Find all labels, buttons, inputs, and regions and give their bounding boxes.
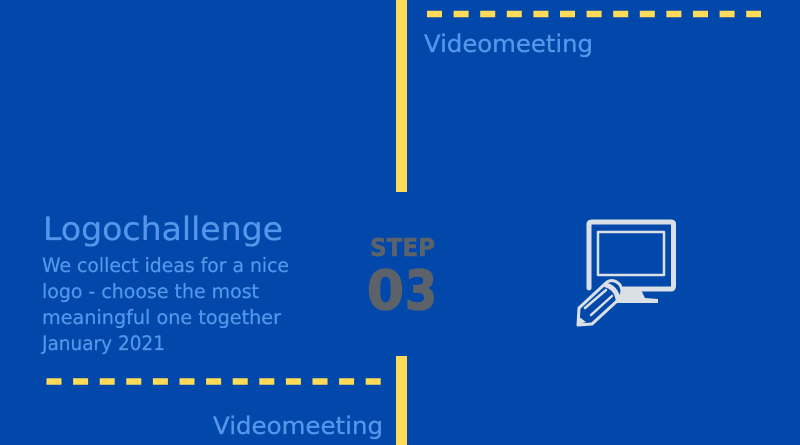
description line 2: logo - choose the most — [42, 280, 259, 303]
pencil stripes — [585, 290, 612, 315]
step number — [367, 259, 437, 322]
step label — [367, 233, 437, 322]
heading: top Videomeeting: Videomeeting — [424, 30, 593, 58]
dashed connector: top — [427, 11, 761, 17]
pencil tip — [577, 316, 586, 325]
icon: monitor with pencil — [577, 222, 674, 325]
timeline bar: top — [396, 0, 407, 192]
date: January 2021 — [40, 332, 165, 355]
timeline bar: bottom — [396, 356, 407, 445]
dashed connector: bottom — [46, 378, 381, 385]
pencil eraser band — [606, 285, 618, 299]
digit 0: 0 — [367, 259, 404, 322]
text block: Logochallenge — [40, 210, 289, 355]
description line 1: We collect ideas for a nice — [42, 254, 289, 277]
pencil — [577, 281, 622, 325]
description line 3: meaningful one together — [42, 306, 282, 329]
heading: bottom Videomeeting: Videomeeting — [213, 412, 383, 440]
heading: Logochallenge: Logochallenge — [43, 210, 283, 248]
pencil body — [578, 281, 622, 325]
step word: STEP — [370, 233, 435, 262]
monitor frame — [589, 222, 674, 289]
digit 3: 3 — [405, 259, 437, 322]
monitor stand — [614, 288, 658, 303]
monitor screen — [598, 232, 664, 275]
